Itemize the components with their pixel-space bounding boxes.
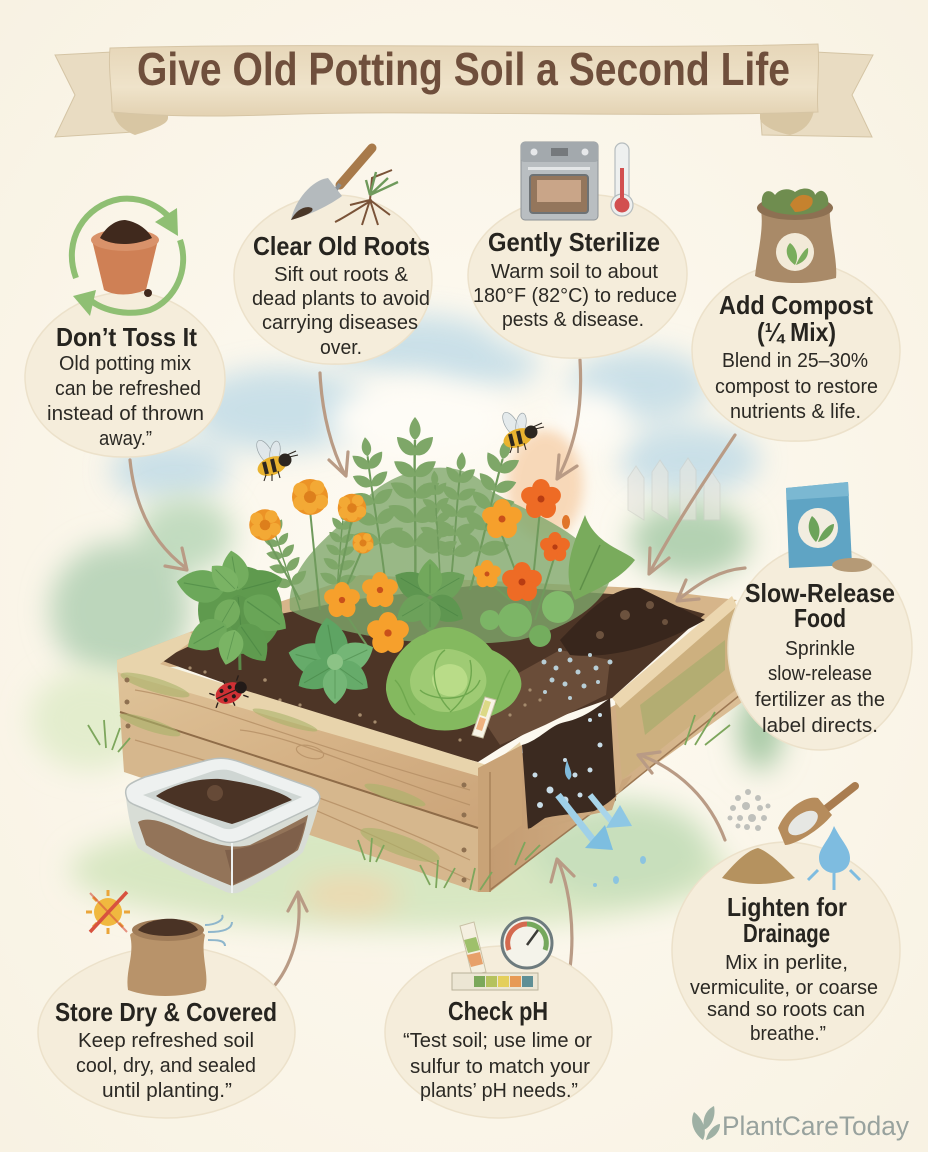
tub: rim — [126, 758, 320, 842]
body text: Mix in perlite, — [725, 952, 848, 974]
plant: background foliage — [290, 468, 610, 644]
tub: inner wall — [143, 770, 302, 829]
watercolor sky and garden backdrop — [30, 315, 782, 930]
bubble — [672, 842, 900, 1060]
bubble — [692, 262, 900, 441]
body text: fertilizer as the — [755, 689, 885, 711]
body text: dead plants to avoid — [252, 288, 430, 310]
tub: transparent walls — [126, 798, 320, 893]
icon: water drop with arrows — [808, 826, 860, 890]
bed: front wall — [117, 632, 522, 892]
icon: compost sack — [755, 189, 836, 283]
body text: can be refreshed — [55, 378, 201, 400]
body text: Sift out roots & — [274, 264, 409, 286]
bubble — [25, 292, 225, 457]
bubble — [468, 195, 687, 358]
logo: PlantCareToday — [692, 1106, 909, 1141]
icon: gravel pile — [722, 848, 795, 884]
plant: nasturtium flowers — [322, 479, 572, 653]
body text: Blend in 25–30% — [722, 350, 868, 372]
body text: “Test soil; use lime or — [403, 1030, 592, 1052]
test strip — [472, 697, 496, 738]
panel: add compost — [692, 189, 900, 441]
panel: lighten for drainage: Drainage — [743, 918, 830, 948]
heading: Slow-Release — [745, 578, 895, 608]
body text: instead of thrown — [47, 403, 204, 425]
heading: Gently Sterilize — [488, 227, 660, 257]
tub: soil behind walls — [138, 815, 308, 886]
body text: breathe.” — [750, 1023, 826, 1045]
plant: basil — [174, 548, 296, 670]
plant: mint — [284, 615, 379, 704]
body text: label directs. — [762, 715, 878, 737]
body text — [690, 952, 878, 1045]
body text: vermiculite, or coarse — [690, 977, 878, 999]
heading: Add Compost — [719, 290, 873, 320]
body text: nutrients & life. — [730, 401, 861, 423]
arrow: store dry to tub — [275, 892, 307, 985]
icon: wind lines — [205, 915, 232, 946]
body text: Warm soil to about — [491, 261, 658, 283]
drainage arrows and drops — [558, 795, 646, 887]
plant: marigolds — [249, 479, 374, 610]
body text: Sprinkle — [785, 638, 855, 660]
bubble — [38, 946, 295, 1118]
bed: right side walls — [490, 596, 745, 892]
icon: fertilizer bag — [786, 482, 872, 572]
icon: pH gauge — [502, 918, 552, 968]
arrow: clear roots to bed — [320, 373, 348, 476]
title banner — [55, 43, 873, 137]
panel: slow-release food: Food — [794, 603, 846, 633]
body text — [252, 264, 430, 359]
panel: gently sterilize — [468, 142, 687, 358]
banner: main ribbon — [109, 44, 819, 116]
body text: cool, dry, and sealed — [76, 1055, 256, 1077]
body text: pests & disease. — [502, 309, 644, 331]
body text — [47, 353, 204, 450]
arrow: check pH to bed — [551, 859, 574, 968]
storage tub — [126, 758, 320, 893]
plant: lettuce — [386, 627, 521, 730]
body text — [715, 350, 878, 423]
body text: 180°F (82°C) to reduce — [473, 285, 677, 307]
icon: thermometer — [611, 143, 633, 216]
arrow: sterilize to bed — [557, 360, 581, 479]
icon: trowel and roots — [291, 148, 398, 225]
bubble — [728, 545, 912, 750]
body text: plants’ pH needs.” — [420, 1080, 578, 1102]
bubble — [385, 946, 612, 1118]
logo text: PlantCareToday — [722, 1111, 909, 1141]
body text: compost to restore — [715, 376, 878, 398]
icon: recycling arrows and pot — [72, 199, 183, 316]
bed: compost pile — [560, 588, 705, 656]
banner: left tail — [55, 52, 135, 137]
bed: perlite dots on soil — [542, 648, 612, 700]
icon: ladybug — [207, 672, 252, 713]
panel: slow-release food — [728, 482, 912, 750]
plants group — [174, 417, 635, 738]
tub: soil top — [156, 779, 292, 824]
icon: bee left — [253, 438, 298, 481]
body text: over. — [320, 337, 362, 359]
heading: Store Dry & Covered — [55, 997, 277, 1027]
bed: back rim — [117, 575, 737, 668]
panel: clear old roots — [234, 148, 432, 364]
panel: lighten for drainage — [672, 786, 900, 1060]
banner: right tail — [760, 52, 873, 137]
plant: broad leaves — [389, 559, 471, 632]
arrow: slow-release to bed — [677, 568, 745, 601]
heading: Lighten for — [727, 892, 847, 922]
icon: pH strip and chart — [452, 922, 538, 990]
bubble — [234, 195, 432, 364]
logo icon — [692, 1106, 720, 1140]
bed: soil specks — [188, 666, 542, 742]
body text: away.” — [99, 428, 152, 450]
plant: nasturtium leaves — [480, 515, 635, 647]
icon: oven — [521, 142, 598, 220]
panel: add compost: (¼ Mix) — [757, 317, 836, 347]
body text: Keep refreshed soil — [78, 1030, 254, 1052]
arrow: lighten to bed — [638, 752, 725, 840]
body text — [473, 261, 677, 331]
panel: check pH — [385, 918, 612, 1118]
icon: perlite pile — [728, 789, 770, 831]
body text — [403, 1030, 592, 1102]
raised garden bed — [117, 575, 745, 892]
grass tufts — [88, 712, 730, 890]
bed: cutaway soil layer — [522, 698, 632, 830]
icon: scoop — [778, 786, 855, 845]
icon: burlap sack — [127, 919, 206, 996]
icon: crossed-out sun — [86, 890, 130, 934]
title text: Give Old Potting Soil a Second Life — [137, 43, 790, 95]
panel: don't toss it — [25, 199, 225, 457]
heading: Don’t Toss It — [56, 322, 197, 352]
body text: slow-release — [768, 663, 872, 685]
banner: fold shadows — [112, 100, 815, 135]
plant: tall herbs — [249, 417, 537, 616]
body text: sulfur to match your — [410, 1056, 590, 1078]
bed: soil surface — [160, 585, 705, 762]
body text: Old potting mix — [59, 353, 191, 375]
body text — [755, 638, 885, 737]
arrow: compost to bed — [649, 435, 735, 574]
arrow: don't toss it to bed — [130, 460, 187, 570]
body text: sand so roots can — [707, 999, 865, 1021]
icon: bee right — [499, 410, 544, 453]
panel: store dry and covered — [38, 890, 295, 1118]
body text: carrying diseases — [262, 312, 418, 334]
body text — [76, 1030, 256, 1102]
heading: Check pH — [448, 996, 548, 1026]
heading: Clear Old Roots — [253, 231, 430, 261]
body text: until planting.” — [102, 1080, 232, 1102]
